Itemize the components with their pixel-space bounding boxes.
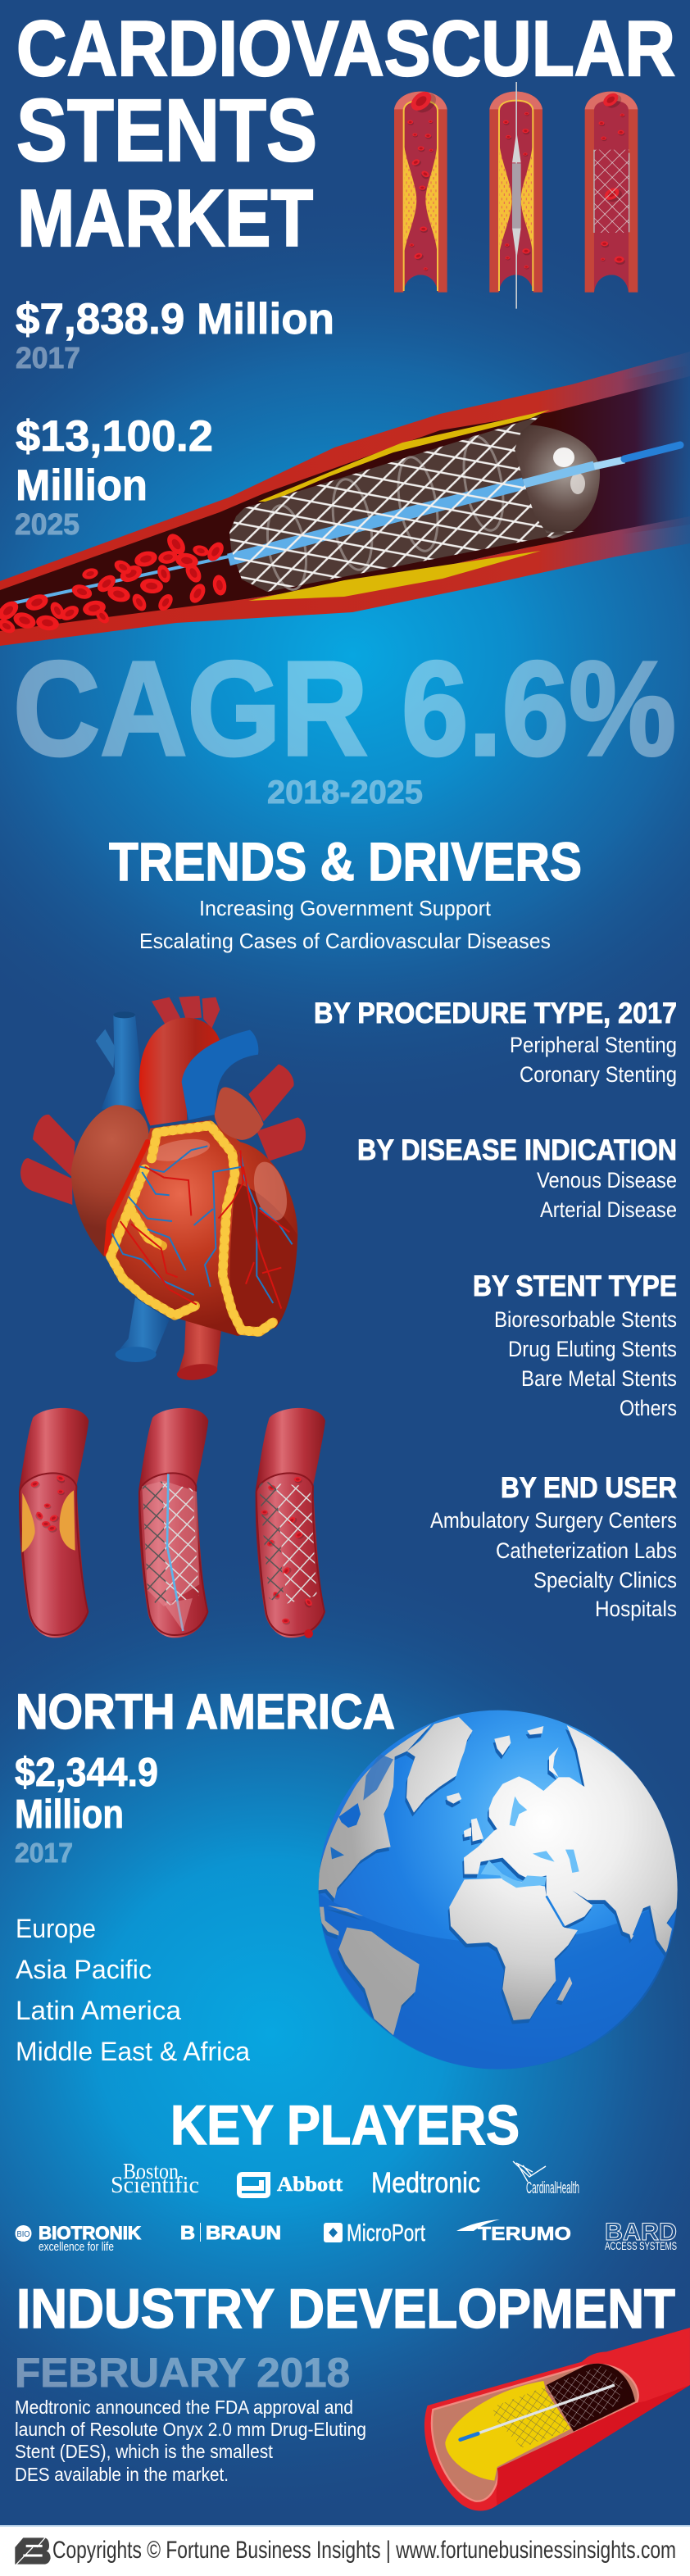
panel: other regions: Europe (16, 1914, 96, 1943)
artery with balloon catheter (489, 82, 542, 309)
logo: Abbott: Abbott (277, 2174, 343, 2196)
balloon (229, 416, 600, 593)
dark lumen (547, 2364, 635, 2432)
front vessel wall (497, 2385, 690, 2506)
artery with deployed stent (585, 89, 638, 293)
panel: trends and drivers: Increasing Government Support (199, 896, 492, 920)
panel: north america: Million (15, 1792, 124, 1837)
logo: Terumo (456, 2219, 571, 2244)
coronary vessels (112, 1146, 293, 1309)
panel: north america (15, 1684, 395, 1868)
vessel with stent being deployed (138, 1408, 208, 1638)
icon: Fortune Business Insights logo (15, 2537, 51, 2565)
panel: February 2018 development: FEBRUARY 2018 (15, 2350, 350, 2396)
market value 2017: 2017 (16, 341, 80, 375)
logo: Cardinal Health (513, 2161, 579, 2197)
lower artery wall (0, 516, 690, 646)
yellow plaque (445, 2381, 571, 2481)
side vessels (20, 1064, 306, 1205)
panel: other regions: Latin America (16, 1996, 181, 2025)
aorta (139, 1018, 220, 1125)
panel: trends and drivers: TRENDS & DRIVERS (109, 831, 582, 892)
panel: by end user (430, 1472, 677, 1621)
panel: February 2018 development: DES available in the market. (15, 2464, 229, 2485)
title: MARKET (17, 173, 313, 263)
panel: by stent type (473, 1270, 677, 1420)
title (16, 5, 675, 263)
panel: north america: $2,344.9 (15, 1751, 158, 1795)
right atrium (71, 1105, 149, 1256)
market value 2017: $7,838.9 Million (16, 295, 334, 343)
vessel with plaque (19, 1408, 89, 1638)
panel: north america: NORTH AMERICA (16, 1684, 395, 1739)
illustration: three artery cross-sections (394, 82, 638, 309)
catheter (9, 445, 680, 604)
market value 2025 (15, 412, 213, 541)
artery with plaque (394, 86, 447, 293)
illustration: stent in artery (0, 352, 690, 646)
logo: Boston Scientific: Scientific (111, 2172, 199, 2198)
fat deposits (107, 1125, 273, 1332)
panel: by end user: Specialty Clinics (533, 1568, 677, 1592)
panel: by end user: Hospitals (595, 1597, 677, 1621)
market value 2017 (16, 295, 334, 375)
footer (0, 2525, 690, 2576)
logo: Medtronic: Medtronic (371, 2167, 480, 2199)
logo: Boston Scientific: Boston (123, 2159, 179, 2183)
atrial appendage (215, 1087, 264, 1140)
outer vessel (424, 2328, 690, 2510)
title: STENTS (16, 80, 317, 179)
illustration: three blood vessels with stents (19, 1408, 325, 1638)
panel: trends and drivers (109, 831, 582, 953)
panel: by stent type: Others (620, 1396, 677, 1420)
CAGR figure: 2018-2025 (267, 775, 423, 811)
catheter (461, 2385, 615, 2440)
logo: MicroPort: MicroPort (347, 2220, 425, 2247)
vena cava (96, 1011, 142, 1109)
logo: Bard: BARD (605, 2219, 677, 2246)
panel: February 2018 development: Stent (DES), which is the smallest (15, 2441, 274, 2462)
artery lumen (0, 365, 690, 635)
top arteries (152, 996, 220, 1029)
panel: other regions: Middle East & Africa (16, 2037, 250, 2066)
logo: B. Braun: BRAUN (206, 2222, 281, 2243)
pulmonary artery (182, 1030, 258, 1120)
logo: Boston Scientific (111, 2159, 199, 2198)
logo: B. Braun (180, 2222, 281, 2243)
logo: Biotronik: excellence for life (39, 2240, 114, 2254)
market value 2025: Million (16, 461, 148, 510)
logo: Biotronik (15, 2223, 141, 2254)
yellow plaque (248, 410, 550, 601)
lower shaded hemisphere (319, 1893, 678, 2069)
logo: Terumo: TERUMO (478, 2223, 571, 2244)
logo: B. Braun: B (180, 2222, 195, 2243)
logos: key players: CardinalHealth (526, 2179, 579, 2197)
panel: February 2018 development (15, 2350, 366, 2485)
vessel interior (432, 2365, 638, 2501)
stent mesh (493, 2366, 624, 2448)
illustration: anatomical heart (20, 996, 306, 1383)
upper artery wall (0, 352, 690, 590)
heading: key players: KEY PLAYERS (170, 2094, 520, 2156)
left ventricle shading (149, 1135, 297, 1325)
market value 2025: $13,100.2 (16, 412, 213, 461)
market value 2025: 2025 (15, 507, 79, 541)
panel: other regions: Asia Pacific (16, 1955, 152, 1984)
panel: other regions (16, 1914, 250, 2066)
vessel with placed stent (256, 1408, 325, 1638)
logo: MicroPort (324, 2220, 425, 2247)
panel: north america: 2017 (15, 1838, 73, 1868)
logos: key players (15, 2159, 677, 2254)
illustration: globe (315, 1711, 679, 2069)
red blood cells (0, 530, 228, 636)
panel: by disease indication (357, 1134, 677, 1222)
logo: Biotronik: BIO (16, 2230, 30, 2239)
lower vessels (116, 1297, 221, 1383)
logo: Biotronik: BIOTRONIK (39, 2223, 141, 2243)
panel: by procedure type (314, 997, 677, 1087)
illustration: vessel cutaway with stent (424, 2328, 690, 2510)
land masses (315, 1717, 679, 2039)
panel: February 2018 development: launch of Resolute Onyx 2.0 mm Drug-Eluting (15, 2419, 366, 2440)
panel: February 2018 development: Medtronic announced the FDA approval and (15, 2397, 353, 2418)
panel: trends and drivers: Escalating Cases of Cardiovascular Diseases (139, 929, 551, 953)
logo: Abbott (239, 2174, 343, 2196)
stent mesh (229, 416, 576, 592)
ventricles (107, 1120, 297, 1336)
